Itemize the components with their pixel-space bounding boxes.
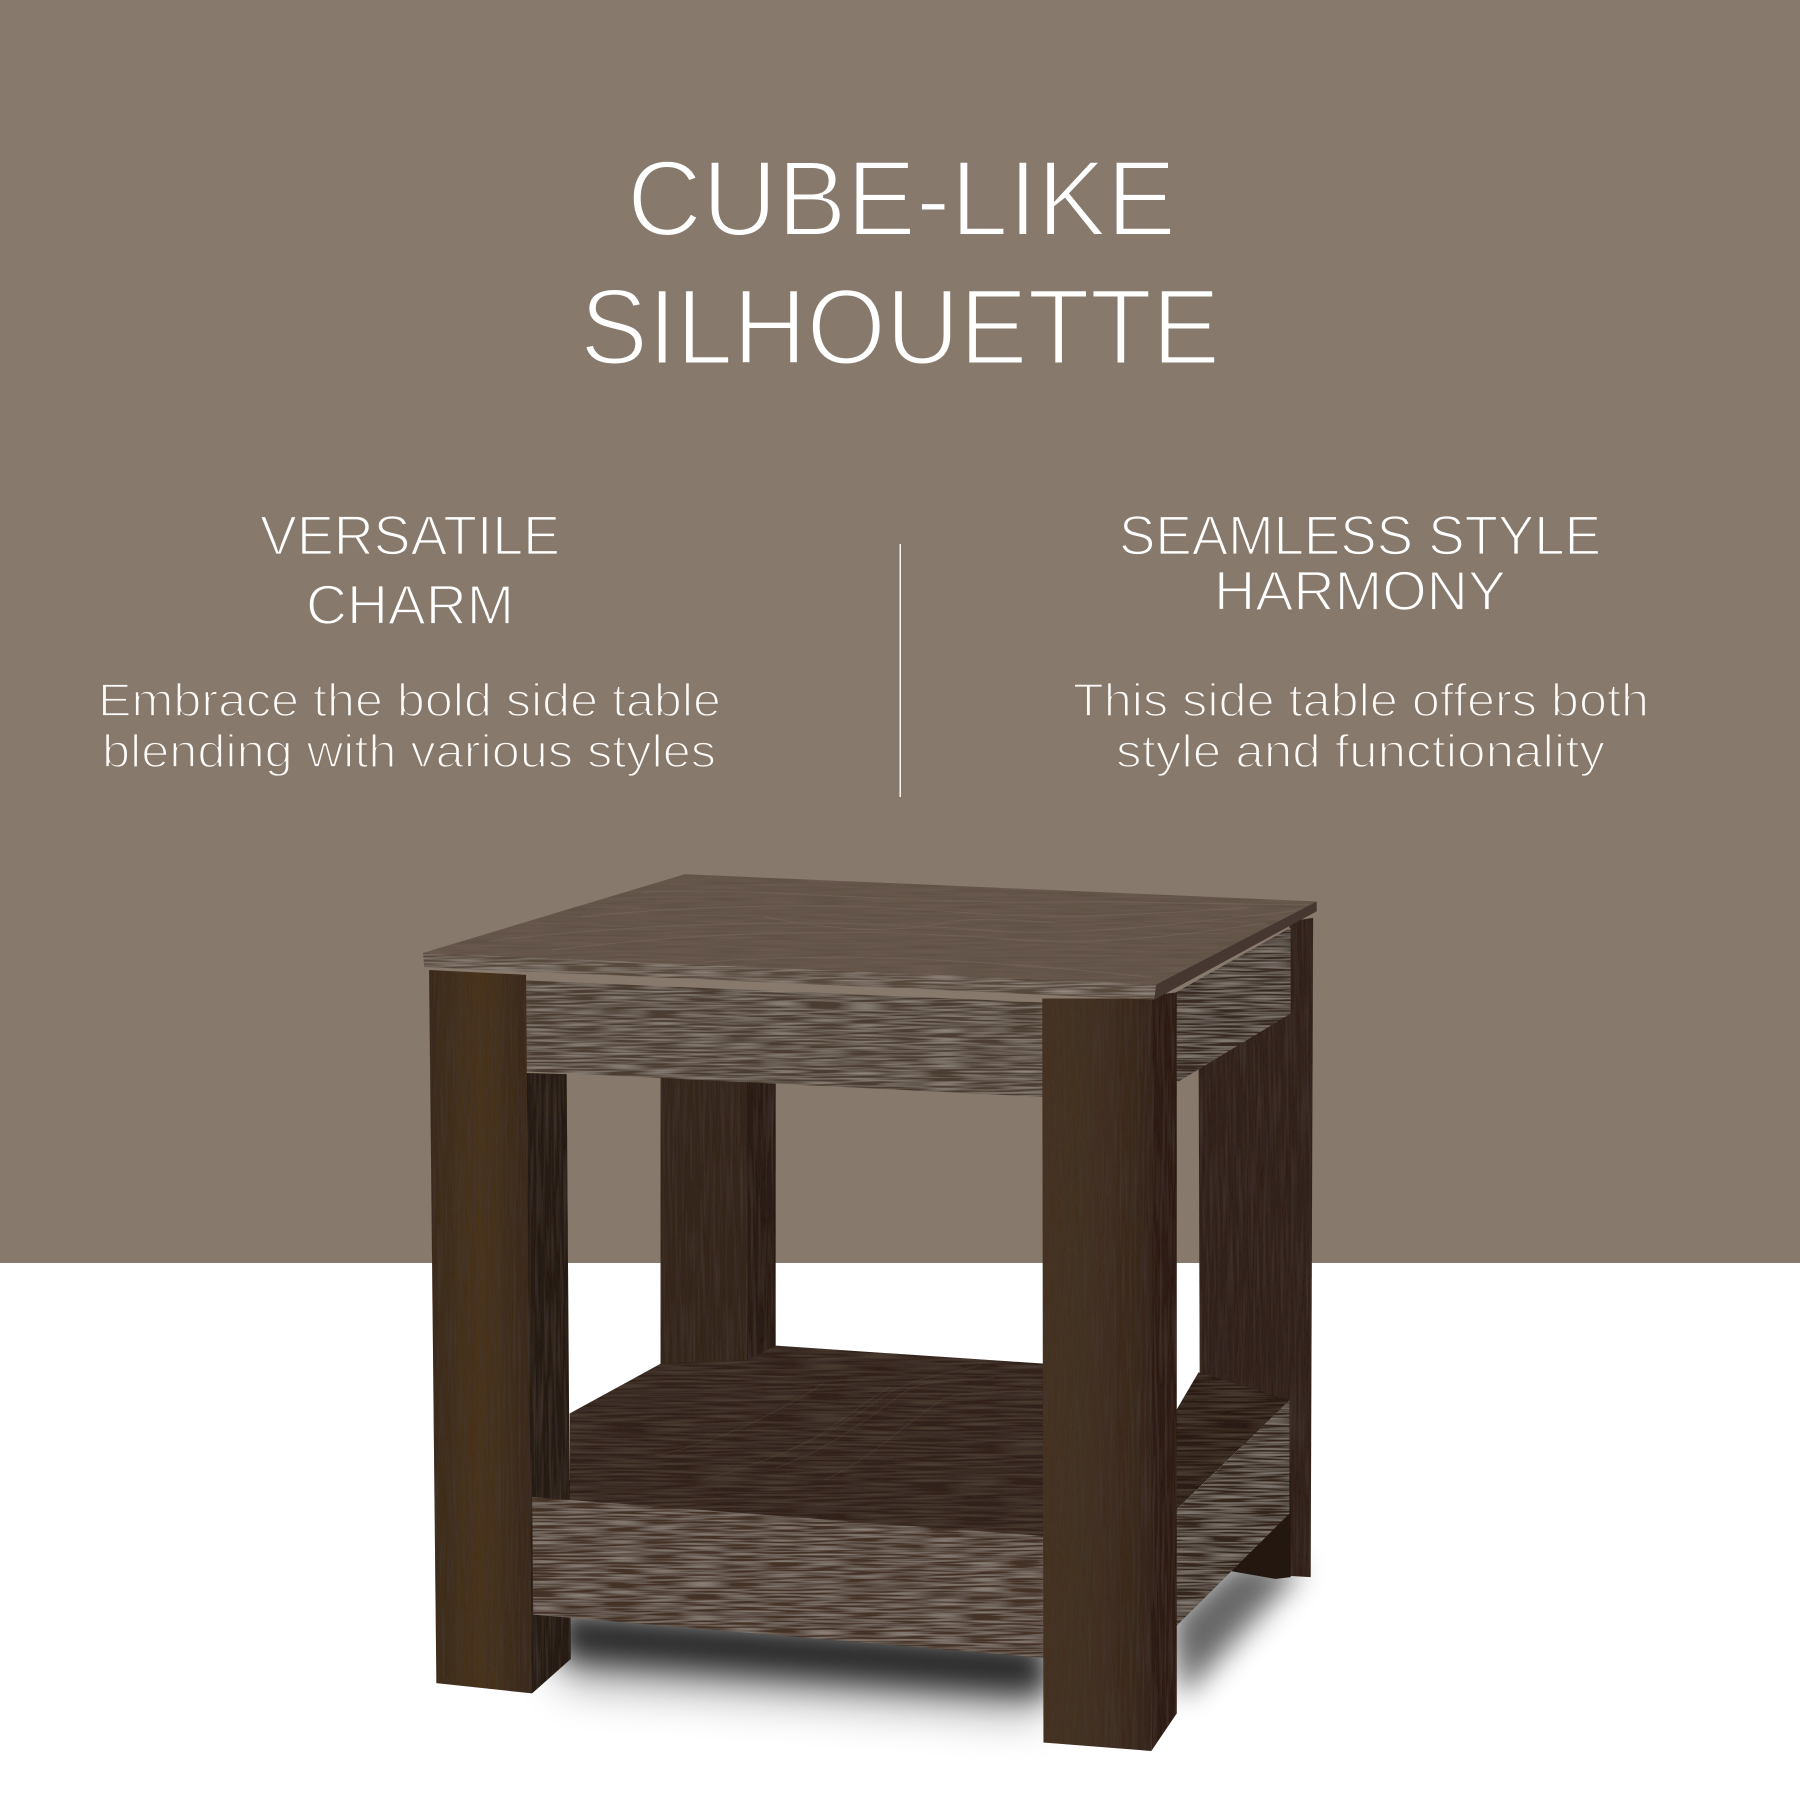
title: SILHOUETTE [580,266,1220,387]
upper front rail [521,980,1050,1097]
text block: versatile charm description: Embrace the bold side table [98,674,721,726]
tabletop wood grain [491,891,1309,977]
lower shelf top [536,1346,1289,1538]
panel: seamless style harmony [1073,504,1649,777]
heading: seamless style harmony [1119,504,1601,622]
back right leg [1199,918,1313,1579]
text block: seamless style description [1073,674,1649,777]
front left leg [429,970,532,1693]
heading: versatile charm: CHARM [306,573,514,636]
title [580,138,1220,387]
front left leg side [525,1073,571,1693]
upper side rail [1171,928,1291,1086]
heading: seamless style harmony: SEAMLESS STYLE [1119,504,1601,566]
tabletop [423,874,1317,1000]
heading: versatile charm [260,504,560,636]
lower side rail [1171,1400,1289,1632]
front right leg [1042,992,1177,1751]
shelf wood grain [654,1365,1030,1480]
panel: versatile charm [98,504,721,777]
product: side table [423,874,1317,1751]
tabletop front edge [423,953,1156,1000]
title: CUBE-LIKE [627,138,1176,258]
lower front rail [532,1497,1050,1658]
text block: versatile charm description [98,674,721,777]
floor shadow [551,1559,1303,1716]
taupe background band [0,0,1800,1263]
tabletop surface [423,874,1317,985]
back centre leg [661,1077,776,1368]
tabletop right edge [1154,902,1317,1000]
heading: seamless style harmony: HARMONY [1214,559,1506,622]
text block: versatile charm description: blending with various styles [102,725,716,777]
text block: seamless style description: style and functionality [1116,725,1605,777]
divider line [900,544,901,797]
text block: seamless style description: This side table offers both [1073,674,1649,726]
heading: versatile charm: VERSATILE [260,504,560,566]
